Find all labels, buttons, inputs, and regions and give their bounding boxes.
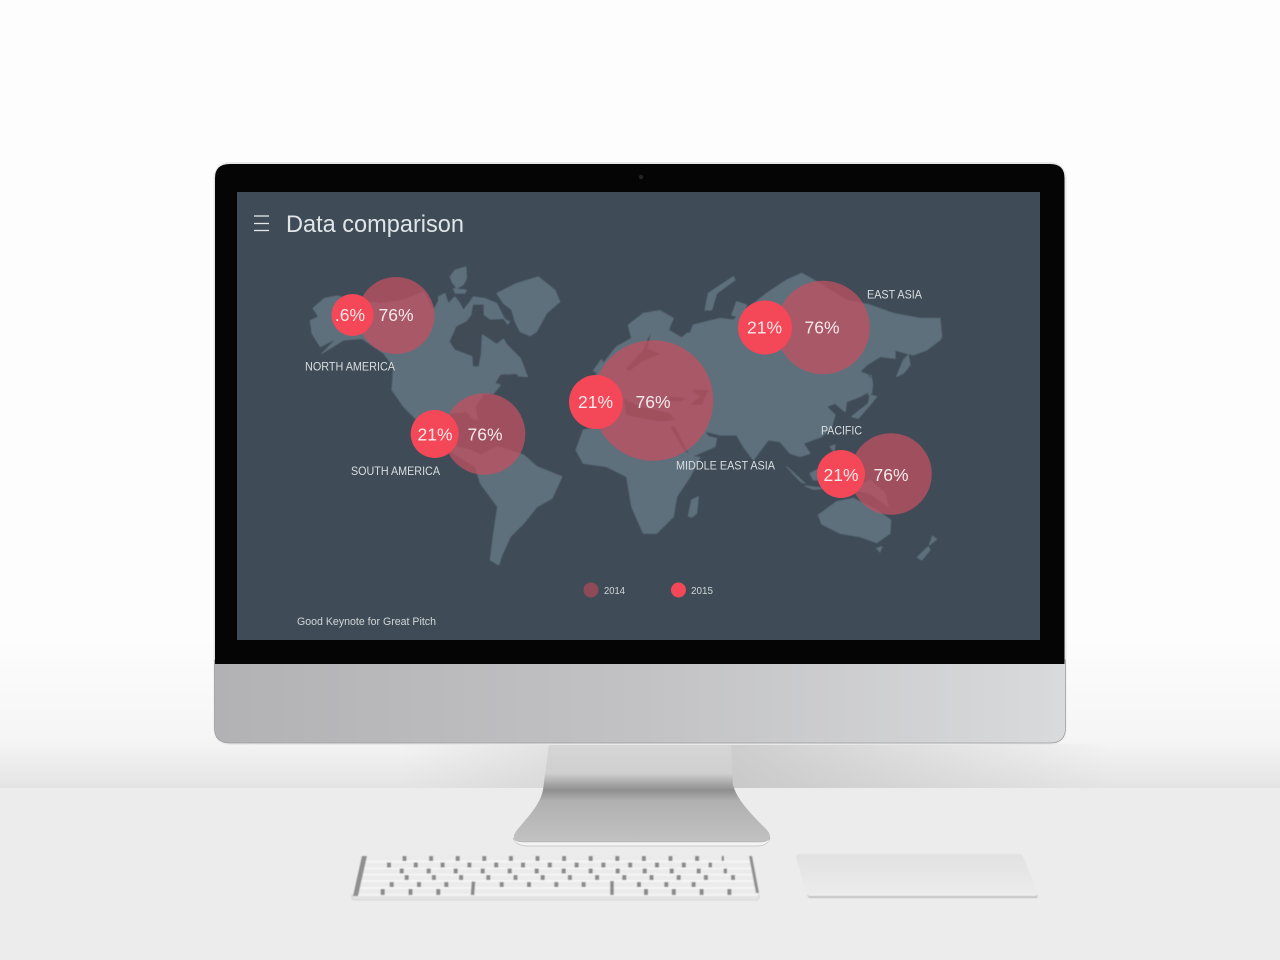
legend item: 2014: 2014 xyxy=(604,586,625,597)
bubble: Middle East Asia xyxy=(569,340,713,461)
monitor body xyxy=(214,162,1066,745)
trackpad xyxy=(796,854,1038,898)
bubble: Middle East Asia: 21% xyxy=(578,392,613,412)
bubble: Pacific xyxy=(817,433,932,515)
icon: menu xyxy=(254,216,269,230)
desk surface xyxy=(0,788,1280,960)
bubble: North America: .6% xyxy=(335,305,365,325)
bubble: East Asia: 76% xyxy=(804,318,840,338)
bubble: North America: 76% xyxy=(378,305,414,325)
map: Canadian Arctic and Greenland xyxy=(438,267,560,357)
map: St Lawrence gulf xyxy=(495,374,507,383)
map: the Americas xyxy=(310,292,562,565)
bubble: South America: 76% xyxy=(467,424,503,444)
screen panel xyxy=(237,192,1040,640)
keyboard xyxy=(352,855,759,900)
label: East Asia: EAST ASIA xyxy=(867,288,922,302)
bubble: East Asia xyxy=(738,281,870,374)
label: South America: SOUTH AMERICA xyxy=(351,464,440,478)
label: North America: NORTH AMERICA xyxy=(305,360,395,374)
wall shadow right of stand xyxy=(730,744,1110,788)
map: inland seas xyxy=(623,329,708,453)
legend item: 2015: 2015 xyxy=(691,586,713,597)
bubble: North America xyxy=(332,277,434,354)
monitor chin xyxy=(214,660,1066,743)
bubble: South America xyxy=(411,393,525,475)
monitor bezel xyxy=(215,164,1064,664)
camera xyxy=(639,175,643,179)
title: Data comparison xyxy=(286,211,464,238)
world map xyxy=(310,267,942,565)
footer text: Good Keynote for Great Pitch xyxy=(297,616,436,628)
wall shadow left of stand xyxy=(400,744,550,788)
label: Middle East Asia: MIDDLE EAST ASIA xyxy=(676,458,775,472)
label: Pacific: PACIFIC xyxy=(821,424,862,438)
bubble: East Asia: 21% xyxy=(747,318,782,338)
bubble: Pacific: 76% xyxy=(873,465,909,485)
bubble: Middle East Asia: 76% xyxy=(635,392,671,412)
map: Hudson Bay xyxy=(450,305,512,366)
bubble: South America: 21% xyxy=(417,424,453,444)
legend xyxy=(584,582,713,598)
bubble: Pacific: 21% xyxy=(823,465,859,485)
map: Eurasia and Africa xyxy=(576,273,942,560)
monitor stand xyxy=(513,744,770,846)
